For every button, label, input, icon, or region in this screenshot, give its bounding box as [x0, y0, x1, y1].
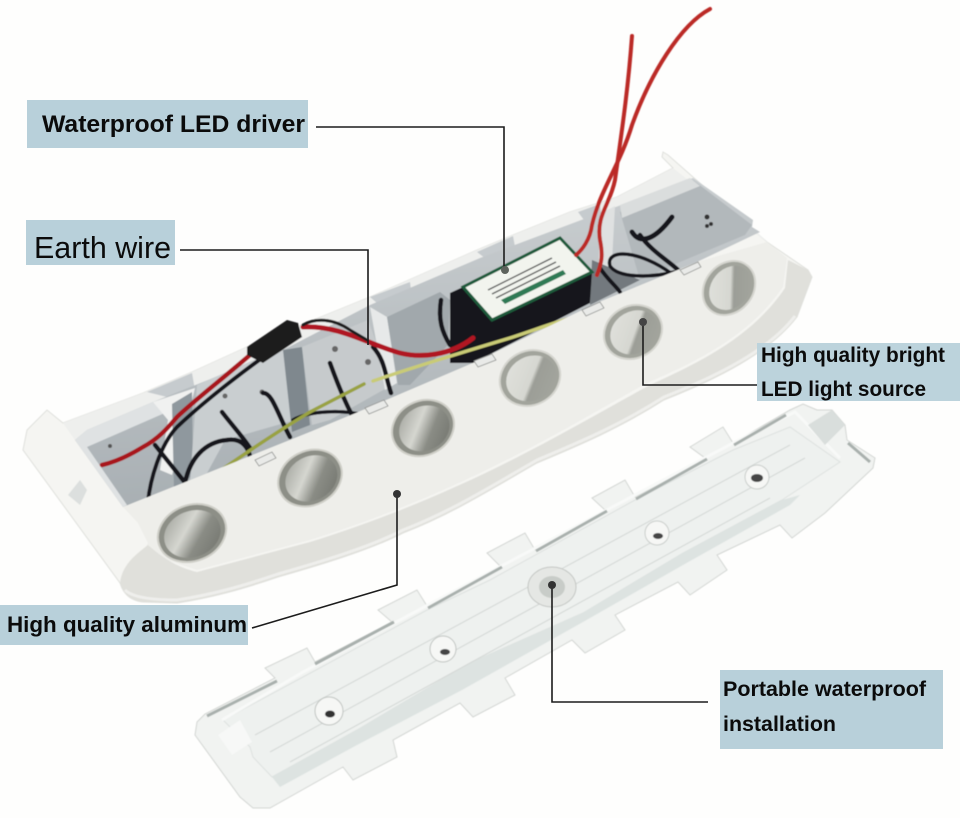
- lens 5: [594, 294, 672, 370]
- lens 3: [382, 389, 464, 467]
- leader: installation: [548, 581, 708, 702]
- lower band: [120, 260, 812, 603]
- label: Portable waterproof installation: [720, 670, 943, 749]
- plate end clip: [218, 720, 252, 755]
- lens 1: [149, 494, 235, 572]
- plate lower channel: [272, 495, 800, 787]
- driver printed label: [463, 238, 592, 320]
- plate floor: [223, 427, 840, 777]
- label: Portable waterproof installation: installation: [723, 712, 836, 736]
- label: Portable waterproof installation: Portable waterproof: [723, 677, 927, 701]
- label: High quality bright LED light source: LED light source: [761, 378, 926, 401]
- lens 4: [490, 340, 570, 416]
- wire connector: [247, 320, 302, 363]
- LED driver: [450, 238, 592, 363]
- label: High quality bright LED light source: [757, 343, 960, 401]
- mounting plate: [195, 404, 875, 808]
- leader: earth wire: [180, 250, 368, 345]
- side screw mark: [68, 480, 87, 505]
- leader: LED light source: [639, 318, 757, 385]
- leader: aluminum: [252, 490, 401, 628]
- red and earth wires: [102, 318, 572, 502]
- leader: LED driver: [316, 127, 509, 274]
- lower band light edge: [125, 316, 795, 600]
- label: High quality aluminum: [0, 605, 248, 645]
- red supply wires: [576, 9, 710, 275]
- cavity side bevel: [75, 402, 167, 507]
- LED lenses: [149, 250, 766, 572]
- callout lines and dots: [180, 127, 757, 702]
- label: Waterproof LED driver: [27, 100, 308, 148]
- label: Waterproof LED driver: Waterproof LED driver: [42, 111, 305, 138]
- rim notches: [147, 204, 602, 397]
- front panel: [123, 242, 787, 570]
- plate rib lines: [255, 445, 805, 762]
- vent marks: [108, 214, 713, 448]
- body outer shell: [23, 152, 812, 603]
- internal black wires: [155, 217, 678, 485]
- lamp body: [23, 9, 812, 603]
- small clips: [255, 262, 701, 466]
- yellow-green earth wire: [217, 384, 364, 473]
- partitions: [153, 178, 752, 490]
- lens 6: [692, 250, 766, 326]
- plate screw holes: [315, 465, 769, 725]
- label: High quality aluminum: High quality aluminum: [7, 612, 247, 637]
- plate outline: [195, 404, 875, 808]
- label: Earth wire: Earth wire: [34, 230, 171, 265]
- lens 2: [268, 439, 352, 517]
- top rim: [63, 168, 770, 440]
- plate upper rail: [222, 412, 840, 720]
- label: High quality bright LED light source: High quality bright: [761, 344, 945, 367]
- driver black housing: [450, 238, 592, 363]
- plate grey slots: [207, 415, 870, 716]
- cavity back wall: [75, 178, 760, 507]
